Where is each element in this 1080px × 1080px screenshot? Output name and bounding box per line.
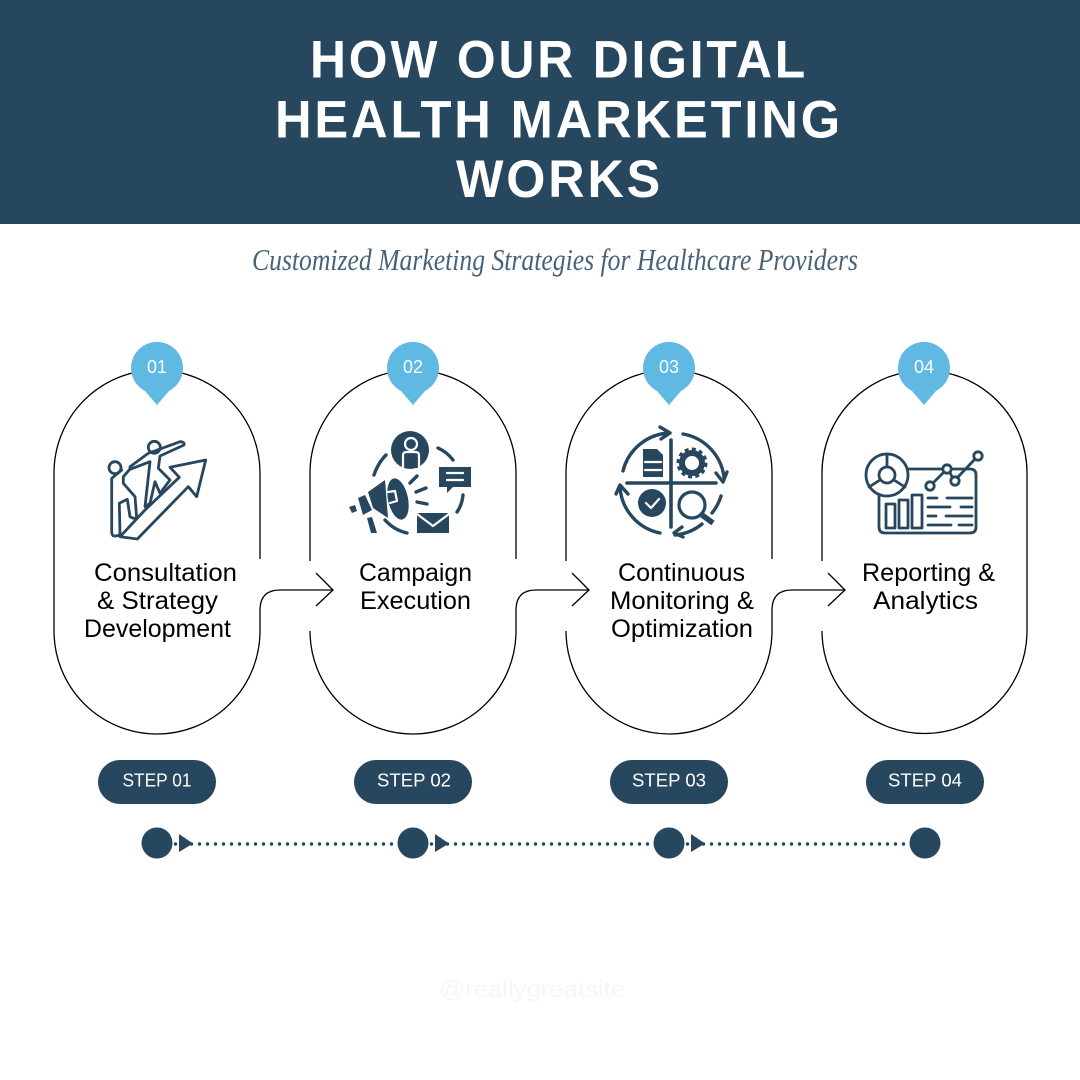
- text: step 4 description: Analytics: [873, 587, 978, 615]
- step label 04: [866, 760, 984, 804]
- icon: monitoring cycle: [616, 427, 727, 537]
- title: HOW OUR DIGITAL: [310, 30, 808, 89]
- panel: step 2 outline: [310, 370, 589, 734]
- text: step 3 description: [610, 559, 754, 643]
- icon: analytics dashboard: [866, 452, 982, 533]
- panel: step 4 outline: [822, 370, 1027, 734]
- badge: 02: 02: [403, 357, 423, 377]
- text: step 1 description: & Strategy: [97, 587, 219, 615]
- badge: 01: [131, 342, 183, 405]
- text: step 2 description: [359, 559, 472, 615]
- badge: 04: [898, 342, 950, 405]
- text: step 3 description: Optimization: [611, 615, 753, 643]
- step label 04: STEP 04: [888, 770, 962, 791]
- icon: climbers on rising arrow: [109, 441, 206, 539]
- panel: step 3 outline: [566, 370, 845, 734]
- badge: 04: 04: [914, 357, 934, 377]
- subtitle: Customized Marketing Strategies for Healthcare Providers: [252, 242, 858, 277]
- badge: 03: [643, 342, 695, 405]
- title: WORKS: [456, 150, 663, 209]
- timeline: [142, 828, 940, 858]
- panel: step 1 outline: [54, 370, 333, 734]
- step label 02: STEP 02: [377, 770, 451, 791]
- badge: 02: [387, 342, 439, 405]
- step label 03: STEP 03: [632, 770, 706, 791]
- step label 02: [354, 760, 472, 804]
- watermark handle: @reallygreatsite: [439, 976, 625, 1002]
- text: step 1 description: Development: [84, 615, 231, 643]
- text: step 3 description: Continuous: [618, 559, 745, 587]
- badge: 03: 03: [659, 357, 679, 377]
- text: step 1 description: Consultation: [94, 559, 237, 587]
- text: step 2 description: Campaign: [359, 559, 472, 587]
- text: step 4 description: Reporting &: [862, 559, 995, 587]
- header banner: [0, 0, 1080, 224]
- text: step 4 description: [862, 559, 995, 615]
- step label 03: [610, 760, 728, 804]
- step label 01: STEP 01: [122, 770, 192, 791]
- step label 01: [98, 760, 216, 804]
- badge: 01: 01: [147, 357, 167, 377]
- text: step 1 description: [84, 559, 237, 643]
- icon: megaphone, person, message and mail: [349, 431, 471, 533]
- title: [275, 30, 843, 209]
- title: HEALTH MARKETING: [275, 90, 843, 149]
- text: step 2 description: Execution: [360, 587, 471, 615]
- text: step 3 description: Monitoring &: [610, 587, 754, 615]
